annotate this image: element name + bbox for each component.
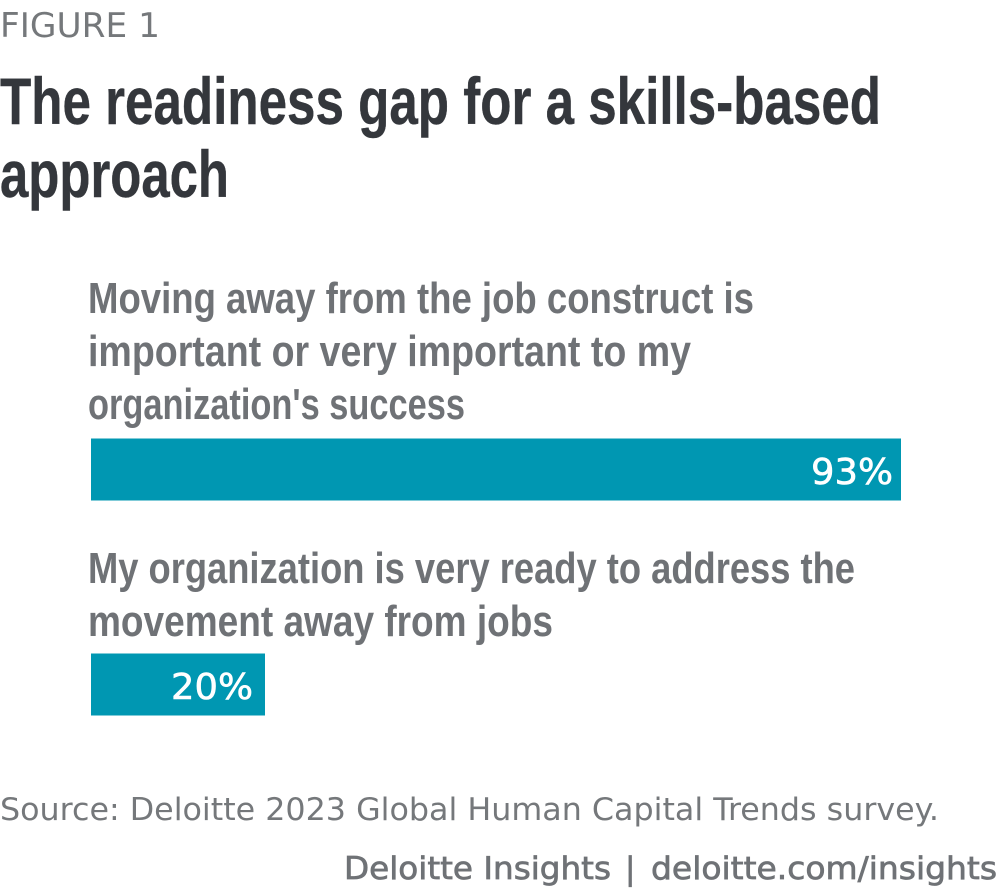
value: 93%: 93% (811, 452, 893, 493)
label: importance (88, 274, 754, 429)
value: 20%: 20% (171, 667, 253, 708)
credit line (344, 851, 997, 887)
label: importance: Moving away from the job construct is (88, 274, 754, 323)
credit line: deloitte.com/insights (651, 851, 997, 887)
source note: Source: Deloitte 2023 Global Human Capital Trends survey. (0, 792, 939, 828)
credit line: Deloitte Insights (344, 851, 611, 887)
title (0, 64, 881, 211)
label: readiness: movement away from jobs (88, 597, 553, 646)
title: approach (0, 137, 229, 211)
label: importance: organization's success (88, 380, 465, 429)
panel: readiness metric (88, 544, 855, 716)
bar: 20% (91, 654, 265, 716)
panel: importance metric (88, 274, 901, 500)
credit line: | (625, 851, 635, 887)
figure label: FIGURE 1 (0, 6, 160, 46)
bar: 93% (91, 438, 901, 500)
label: importance: important or very important to my (88, 327, 691, 376)
label: readiness (88, 544, 855, 646)
label: readiness: My organization is very ready to address the (88, 544, 855, 593)
